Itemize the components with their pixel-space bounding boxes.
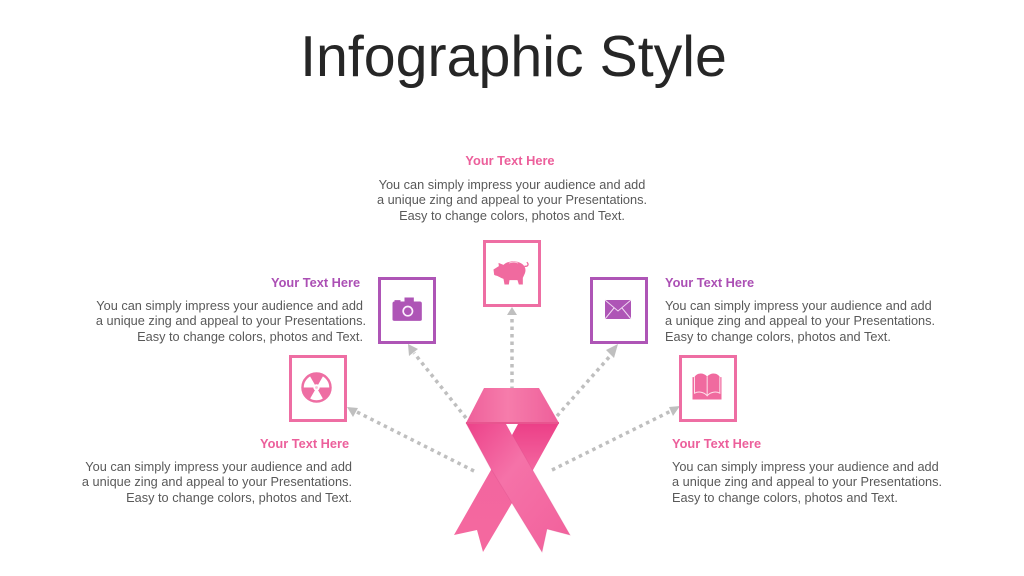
ribbon top loop	[466, 388, 559, 423]
text block	[377, 177, 647, 223]
text block: You can simply impress your audience and add	[379, 177, 645, 192]
text block: You can simply impress your audience and add	[672, 459, 939, 474]
text block: Easy to change colors, photos and Text.	[126, 490, 352, 505]
text block: Easy to change colors, photos and Text.	[665, 329, 891, 344]
heading: Your Text Here	[271, 275, 360, 290]
panel: upper right	[590, 275, 935, 344]
icon box: piggy bank	[483, 240, 541, 307]
text block: a unique zing and appeal to your Presentations.	[96, 313, 366, 328]
icon box: radiation	[289, 355, 347, 422]
text block: You can simply impress your audience and add	[665, 298, 932, 313]
text block: Easy to change colors, photos and Text.	[137, 329, 363, 344]
text block: a unique zing and appeal to your Presentations.	[82, 474, 352, 489]
back band	[454, 423, 559, 552]
icon box: envelope	[590, 277, 648, 344]
text block: a unique zing and appeal to your Presentations.	[377, 192, 647, 207]
text block	[665, 298, 935, 344]
text block: Easy to change colors, photos and Text.	[399, 208, 625, 223]
front band	[466, 423, 570, 552]
heading: Your Text Here	[465, 153, 555, 168]
text block: a unique zing and appeal to your Presentations.	[672, 474, 942, 489]
heading: Your Text Here	[672, 436, 761, 451]
heading: Your Text Here	[665, 275, 754, 290]
panel: lower left	[82, 355, 352, 505]
text block	[82, 459, 352, 505]
text block: You can simply impress your audience and add	[85, 459, 352, 474]
panel: upper left	[96, 275, 436, 344]
heading: Your Text Here	[260, 436, 349, 451]
text block	[672, 459, 942, 505]
title: Infographic Style	[300, 25, 727, 89]
text block	[96, 298, 366, 344]
text block: You can simply impress your audience and add	[96, 298, 363, 313]
panel: top	[377, 153, 647, 307]
panel: lower right	[672, 355, 942, 505]
ribbon	[454, 388, 571, 553]
ribbon gap	[506, 424, 518, 435]
icon box: camera	[378, 277, 436, 344]
text block: Easy to change colors, photos and Text.	[672, 490, 898, 505]
icon box: book	[679, 355, 737, 422]
text block: a unique zing and appeal to your Presentations.	[665, 313, 935, 328]
